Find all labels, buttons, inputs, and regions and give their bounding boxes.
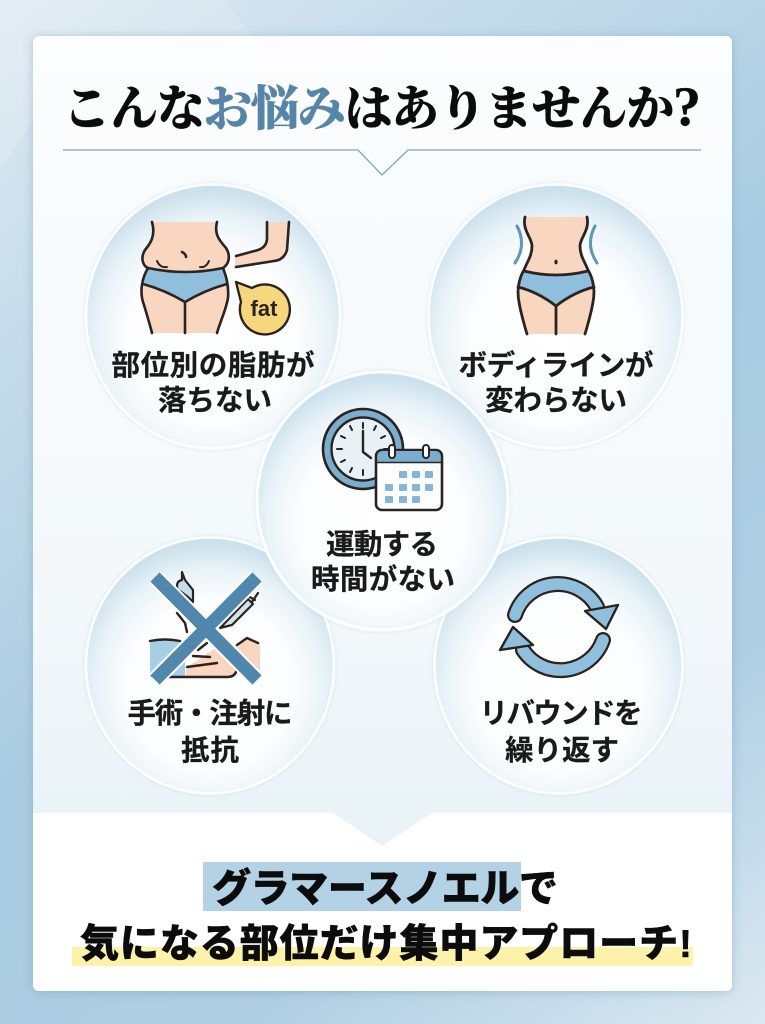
closing message line 2: 気になる部位だけ集中アプローチ! — [80, 923, 692, 966]
label: 部位別の脂肪が — [112, 349, 314, 382]
highlight: product name — [203, 862, 521, 911]
icon: fat speech bubble: fat — [251, 296, 278, 321]
closing message line 1: グラマースノエルで — [212, 867, 558, 911]
label: リバウンドを — [480, 698, 642, 730]
title divider with pointer — [63, 150, 701, 175]
icon: surgery crossed out — [150, 572, 260, 680]
title: こんなお悩みはありませんか? — [63, 76, 701, 138]
label: ボディラインが — [458, 349, 654, 382]
icon: calendar — [376, 445, 442, 510]
icon: belly with fat — [141, 222, 229, 333]
icon: slim waist — [515, 217, 597, 334]
panel: bottom white band — [33, 813, 732, 991]
label: 時間がない — [311, 563, 455, 596]
panel: circle surgery aversion — [86, 538, 334, 794]
icon: clock — [323, 409, 403, 489]
icon: repeat arrows — [500, 584, 618, 670]
panel: circle rebound — [434, 538, 682, 794]
label: 繰り返す — [505, 735, 619, 767]
highlight: yellow marker — [72, 947, 693, 966]
label: 運動する — [326, 529, 438, 561]
label: 手術・注射に — [128, 698, 292, 730]
label: 変わらない — [485, 385, 627, 417]
icon: arm — [235, 222, 289, 267]
label: 抵抗 — [181, 735, 239, 767]
panel: circle no time — [257, 372, 508, 630]
label: 落ちない — [158, 385, 272, 417]
icon: fat speech bubble — [236, 282, 290, 334]
panel: circle fat by body part — [86, 184, 340, 448]
panel: circle body line — [428, 184, 682, 448]
